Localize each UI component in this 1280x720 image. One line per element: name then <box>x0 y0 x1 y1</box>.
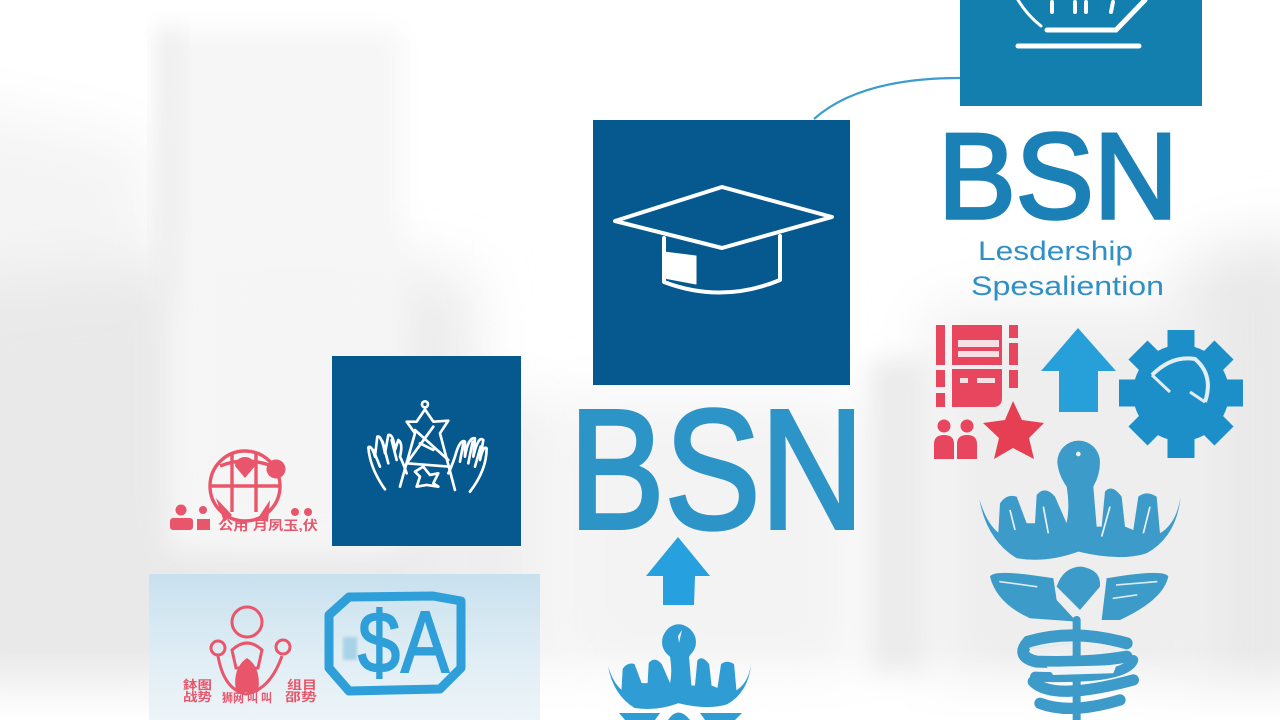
big BSN: BSN <box>569 375 864 565</box>
icon: medical crown center <box>608 624 751 720</box>
icon: red person with globe: 狮网 叫 叫 <box>222 691 272 705</box>
panel: graduation cap <box>593 120 850 385</box>
icon: red document with people and star <box>934 325 1044 459</box>
panel: light blue dollar panel <box>149 574 540 720</box>
text: leadership specialization: Lesdership <box>978 236 1133 266</box>
icon: red globe and people <box>170 451 318 533</box>
icon: hands holding star <box>368 401 487 492</box>
icon: red person with globe: 鉢图 <box>183 677 212 692</box>
icon: red person with globe <box>183 607 317 705</box>
icon: right upward arrow <box>1041 328 1116 412</box>
icon: caduceus right <box>990 567 1168 720</box>
text: leadership specialization: Spesaliention <box>971 271 1164 301</box>
heading: top BSN: BSN <box>938 108 1178 244</box>
connector line to top box <box>814 78 960 119</box>
icon: dollar A badge: A <box>401 594 449 691</box>
icon: cropped hands <box>1018 0 1145 46</box>
icon: dollar A badge: $ <box>358 595 400 691</box>
icon: red person with globe: 战势 <box>183 689 212 704</box>
text: leadership specialization <box>971 236 1164 301</box>
icon: gear with person <box>1119 330 1243 458</box>
panel: top box with icon <box>960 0 1202 106</box>
icon: graduation cap <box>615 187 832 293</box>
panel: dark blue hands and star <box>332 356 521 546</box>
icon: red person with globe: 邵势 <box>285 689 317 704</box>
icon: center upward arrow <box>646 537 710 605</box>
icon: medical crown right <box>979 441 1181 560</box>
icon: red person with globe: 组目 <box>287 677 317 692</box>
icon: dollar A badge <box>329 594 461 691</box>
label: garbled caption: 公用 月夙玉,伏 <box>218 518 318 533</box>
